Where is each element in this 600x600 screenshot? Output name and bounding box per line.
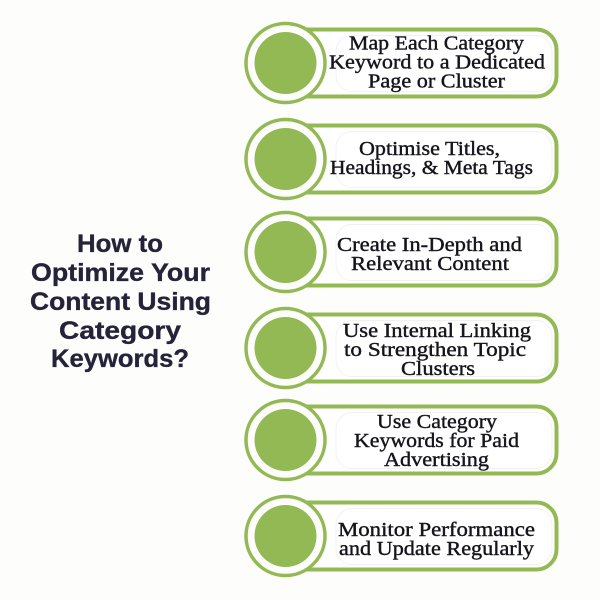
step 4 text: Clusters: [401, 358, 475, 380]
step 3 text: [337, 234, 522, 275]
step 6 text: Monitor Performance: [338, 519, 535, 541]
step 1 text: Map Each Category: [349, 32, 525, 54]
icon: green circle 2: [246, 120, 325, 198]
step 5: paid advertising: [246, 400, 556, 480]
title: Keywords?: [51, 345, 189, 373]
step 4: internal linking: [246, 308, 556, 388]
icon: green circle 6: [246, 496, 325, 576]
title: [30, 230, 211, 373]
step 3: in-depth content: [246, 212, 556, 292]
icon: green circle 5: [246, 400, 325, 480]
step 5 text: [354, 411, 519, 471]
step 4 text: Use Internal Linking: [343, 320, 531, 342]
title: Category: [59, 317, 181, 345]
step 1: dedicated page or cluster: [246, 24, 556, 102]
step 2 text: Optimise Titles,: [359, 138, 500, 160]
step 1 text: Page or Cluster: [368, 70, 505, 92]
step 6 text: [338, 519, 535, 560]
title: Optimize Your: [31, 259, 210, 287]
step 3 text: Create In-Depth and: [337, 234, 522, 256]
step 5 text: Use Category: [377, 411, 498, 433]
step 6: monitor performance: [246, 496, 556, 576]
icon: green circle 1: [246, 24, 325, 102]
step 5 text: Advertising: [384, 449, 489, 471]
title: Content Using: [30, 288, 211, 316]
step 5 text: Keywords for Paid: [354, 430, 519, 452]
title: How to: [77, 230, 163, 258]
step 1 text: Keyword to a Dedicated: [329, 52, 545, 74]
step 4 text: to Strengthen Topic: [344, 339, 526, 361]
step 6 text: and Update Regularly: [339, 538, 535, 560]
step 3 text: Relevant Content: [351, 253, 509, 275]
step 4 text: [343, 320, 531, 380]
step 2: titles, headings, meta tags: [246, 120, 556, 198]
step 2 text: [330, 138, 533, 179]
icon: green circle 3: [246, 212, 325, 292]
icon: green circle 4: [246, 308, 325, 388]
step 1 text: [329, 32, 545, 92]
step 2 text: Headings, & Meta Tags: [330, 157, 533, 179]
